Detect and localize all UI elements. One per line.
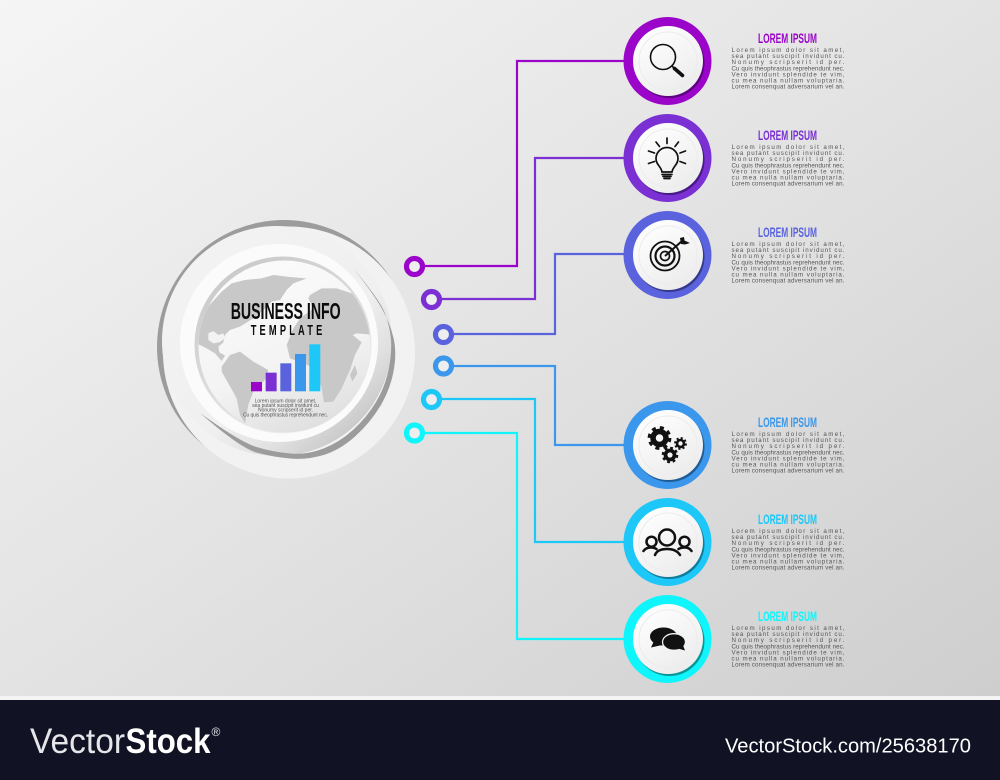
heading: LOREM IPSUM xyxy=(758,127,817,143)
text block: cu mea nulla nullam voluptaria. xyxy=(732,272,845,278)
text block: Cu quis theophrastus reprehendunt nec. xyxy=(732,643,845,650)
text block: Vero invidunt splendide te vim, xyxy=(732,265,845,272)
text block: Cu quis theophrastus reprehendunt nec. xyxy=(732,65,845,72)
heading: LOREM IPSUM xyxy=(758,224,817,240)
text block: Nonumy scripserit id per. xyxy=(732,540,845,547)
panel 1: search xyxy=(624,17,845,105)
globe caption: sea putant suscipit invidunt cu xyxy=(252,403,319,409)
text block: Vero invidunt splendide te vim, xyxy=(732,71,845,78)
text block xyxy=(732,47,845,91)
heading: LOREM IPSUM xyxy=(758,608,817,624)
text block: Cu quis theophrastus reprehendunt nec. xyxy=(732,546,845,553)
text block: Cu quis theophrastus reprehendunt nec. xyxy=(732,259,845,266)
panel 3: target xyxy=(624,211,845,299)
text block: cu mea nulla nullam voluptaria. xyxy=(732,656,845,662)
text block: Lorem consenquat adversarium vel an. xyxy=(732,565,845,572)
panel 2: idea xyxy=(624,114,845,202)
text block: Vero invidunt splendide te vim, xyxy=(732,168,845,175)
text block: Lorem consenquat adversarium vel an. xyxy=(732,181,845,188)
icon: magnifier xyxy=(650,44,682,76)
panel 6: chat xyxy=(624,595,845,683)
heading: LOREM IPSUM xyxy=(758,414,817,430)
icon: people xyxy=(644,530,692,555)
logo xyxy=(30,722,220,761)
text block: Lorem consenquat adversarium vel an. xyxy=(732,84,845,91)
text block: Vero invidunt splendide te vim, xyxy=(732,649,845,656)
world map xyxy=(192,275,377,423)
text block: Cu quis theophrastus reprehendunt nec. xyxy=(732,162,845,169)
globe caption: Lorem ipsum dolor sit amet, xyxy=(255,398,316,404)
text block: Lorem consenquat adversarium vel an. xyxy=(732,278,845,285)
text block: Nonumy scripserit id per. xyxy=(732,443,845,450)
icon: speech bubbles xyxy=(650,628,686,650)
heading: LOREM IPSUM xyxy=(758,30,817,46)
logo: Stock xyxy=(126,722,211,761)
panel 5: team xyxy=(624,498,845,586)
text block: sea putant suscipit invidunt cu. xyxy=(732,534,845,541)
footer bar xyxy=(0,696,1000,780)
text block xyxy=(732,625,845,669)
text block: Cu quis theophrastus reprehendunt nec. xyxy=(732,449,845,456)
text block: sea putant suscipit invidunt cu. xyxy=(732,53,845,60)
globe caption: Nonumy scripserit id per. xyxy=(258,408,313,414)
text block: Lorem ipsum dolor sit amet, xyxy=(732,144,845,151)
icon: target and dart xyxy=(650,237,690,270)
central globe badge xyxy=(157,220,415,478)
text block xyxy=(732,431,845,475)
text block: Nonumy scripserit id per. xyxy=(732,253,845,260)
text block xyxy=(732,144,845,188)
text block: cu mea nulla nullam voluptaria. xyxy=(732,558,845,566)
text block: Nonumy scripserit id per. xyxy=(732,59,845,66)
image id: VectorStock.com/25638170 xyxy=(725,736,971,758)
connector nodes xyxy=(406,258,452,441)
text block: Lorem consenquat adversarium vel an. xyxy=(732,662,845,669)
text block: Lorem ipsum dolor sit amet, xyxy=(732,47,845,54)
bar chart xyxy=(251,344,320,391)
text block: sea putant suscipit invidunt cu. xyxy=(732,247,845,254)
text block xyxy=(732,528,845,572)
text block: cu mea nulla nullam voluptaria. xyxy=(732,78,845,84)
text block: Lorem ipsum dolor sit amet, xyxy=(732,241,845,248)
text block: Lorem ipsum dolor sit amet, xyxy=(732,625,845,632)
text block xyxy=(732,241,845,285)
text block: sea putant suscipit invidunt cu. xyxy=(732,437,845,444)
text block: cu mea nulla nullam voluptaria. xyxy=(732,462,845,468)
subtitle: TEMPLATE xyxy=(251,322,322,339)
text block: Lorem ipsum dolor sit amet, xyxy=(732,431,845,438)
text block: sea putant suscipit invidunt cu. xyxy=(732,150,845,157)
globe caption xyxy=(243,398,328,418)
text block: Vero invidunt splendide te vim, xyxy=(732,455,845,462)
text block: Nonumy scripserit id per. xyxy=(732,637,845,644)
panel 4: settings xyxy=(624,401,845,489)
logo: ® xyxy=(212,725,220,739)
connector lines xyxy=(423,61,625,639)
title: BUSINESS INFO xyxy=(231,298,341,324)
text block: sea putant suscipit invidunt cu. xyxy=(732,631,845,638)
logo: Vector xyxy=(30,722,125,761)
text block: Nonumy scripserit id per. xyxy=(732,156,845,163)
text block: Vero invidunt splendide te vim, xyxy=(732,552,845,559)
text block: cu mea nulla nullam voluptaria. xyxy=(732,174,845,182)
globe caption: Cu quis theophrastus reprehendunt nec. xyxy=(243,412,328,418)
icon: light bulb xyxy=(648,138,686,178)
icon: gears xyxy=(649,428,686,462)
text block: Lorem consenquat adversarium vel an. xyxy=(732,468,845,475)
heading: LOREM IPSUM xyxy=(758,511,817,527)
text block: Lorem ipsum dolor sit amet, xyxy=(732,528,845,535)
